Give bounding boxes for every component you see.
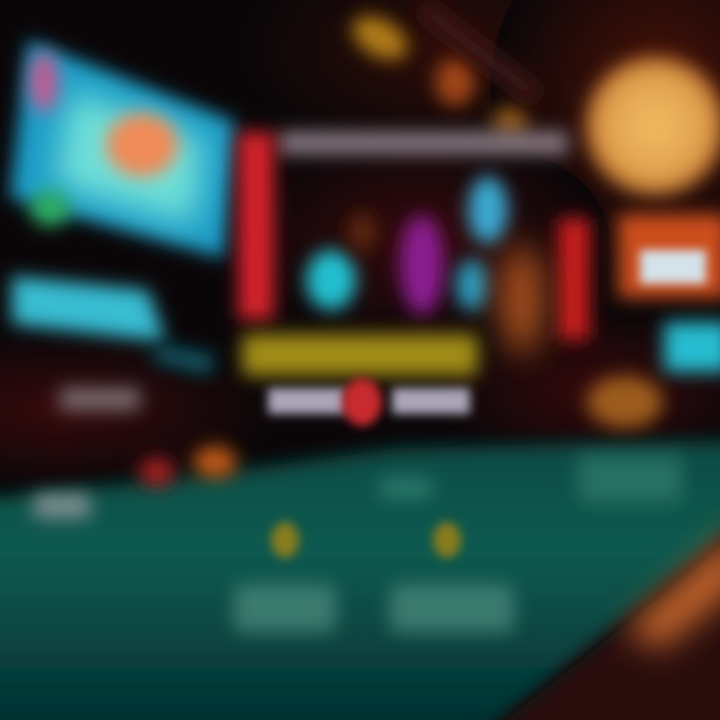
moon-shaped round lamp [585, 56, 720, 196]
amber lamp [587, 376, 663, 428]
white button band [268, 378, 470, 426]
game symbols [306, 176, 546, 355]
red pillar right [558, 218, 590, 340]
top marquee band [278, 132, 568, 154]
yellow headline block [242, 334, 478, 376]
red pillar left [238, 132, 274, 320]
ceiling lights [345, 0, 545, 138]
green table [0, 440, 720, 720]
table markings [234, 456, 682, 632]
right orange sign [618, 214, 720, 298]
bottom right wooden rail [470, 525, 720, 720]
large left screen [10, 40, 235, 258]
lower left screen [12, 276, 215, 375]
right cyan screen [664, 322, 720, 372]
left white labels [34, 388, 140, 518]
red and orange chips [139, 446, 237, 486]
